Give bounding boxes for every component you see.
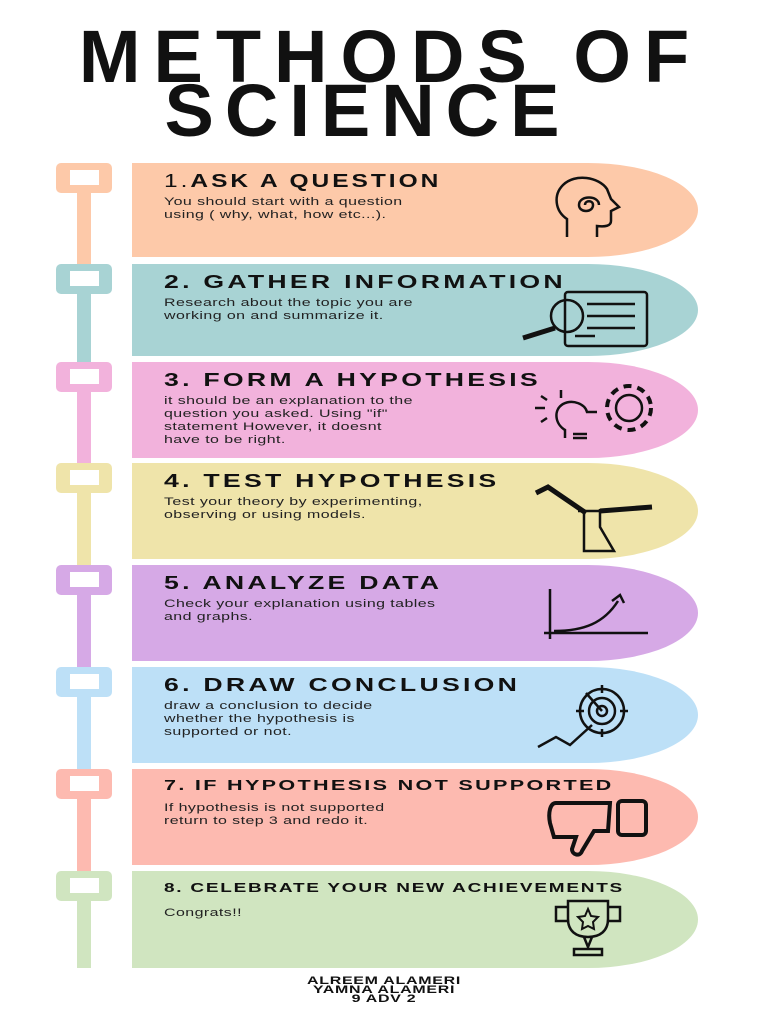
timeline bbox=[56, 163, 112, 968]
panel: draw conclusion: supported or not. bbox=[164, 726, 292, 738]
panel: ask a question: using ( why, what, how etc...). bbox=[164, 209, 386, 221]
panel: draw conclusion: draw a conclusion to decide bbox=[164, 700, 373, 712]
icon: graph bbox=[544, 589, 648, 639]
icon: trophy bbox=[554, 900, 622, 956]
panel: form a hypothesis: statement However, it doesnt bbox=[164, 421, 382, 433]
panel: gather information: working on and summarize it. bbox=[164, 310, 384, 322]
panel: test hypothesis: observing or using models. bbox=[164, 509, 366, 521]
icon: head bbox=[555, 176, 621, 237]
credits: YAMNA ALAMERI bbox=[313, 984, 455, 996]
icon: thumbs down bbox=[547, 799, 648, 857]
title: SCIENCE bbox=[165, 69, 570, 152]
icon: target bbox=[537, 685, 628, 748]
credits: 9 ADV 2 bbox=[352, 993, 416, 1005]
panel: draw conclusion bbox=[132, 667, 698, 763]
panel: if hypothesis not supported: If hypothesis is not supported bbox=[164, 802, 385, 814]
panel: ask a question: You should start with a question bbox=[164, 196, 403, 208]
icon: flask dropper bbox=[534, 484, 652, 552]
panel: ask a question: 1.ASK A QUESTION bbox=[164, 171, 441, 191]
panel: draw conclusion: 6. DRAW CONCLUSION bbox=[164, 675, 520, 695]
panel: if hypothesis not supported bbox=[132, 769, 698, 865]
panel: gather information: 2. GATHER INFORMATION bbox=[164, 272, 566, 292]
title: METHODS OF bbox=[79, 15, 702, 98]
panel: gather information: Research about the topic you are bbox=[164, 297, 413, 309]
panel: celebrate: Congrats!! bbox=[164, 907, 242, 919]
panel: celebrate: 8. CELEBRATE YOUR NEW ACHIEVEMENTS bbox=[164, 880, 624, 895]
panel: test hypothesis bbox=[132, 463, 698, 559]
panel: gather information bbox=[132, 264, 698, 356]
panel: if hypothesis not supported: 7. IF HYPOTHESIS NOT SUPPORTED bbox=[164, 777, 614, 794]
panel: analyze data bbox=[132, 565, 698, 661]
icon: magnifier document bbox=[522, 290, 648, 348]
panel: draw conclusion: whether the hypothesis is bbox=[164, 713, 355, 725]
title bbox=[79, 15, 702, 152]
panel: ask a question bbox=[132, 163, 698, 257]
panel: form a hypothesis: have to be right. bbox=[164, 434, 286, 446]
panel: analyze data: Check your explanation using tables bbox=[164, 598, 435, 610]
panel: analyze data: 5. ANALYZE DATA bbox=[164, 573, 442, 593]
icon: bulb and gear bbox=[535, 384, 653, 440]
panel: form a hypothesis: question you asked. Using "if" bbox=[164, 408, 388, 420]
panel: form a hypothesis bbox=[132, 362, 698, 458]
panel: if hypothesis not supported: return to step 3 and redo it. bbox=[164, 815, 368, 827]
credits bbox=[307, 975, 461, 1005]
panel: test hypothesis: Test your theory by experimenting, bbox=[164, 496, 423, 508]
panel: analyze data: and graphs. bbox=[164, 611, 253, 623]
panel: form a hypothesis: it should be an explanation to the bbox=[164, 395, 413, 407]
panel: celebrate bbox=[132, 871, 698, 968]
credits: ALREEM ALAMERI bbox=[307, 975, 461, 987]
panel: test hypothesis: 4. TEST HYPOTHESIS bbox=[164, 471, 499, 491]
panel: form a hypothesis: 3. FORM A HYPOTHESIS bbox=[164, 370, 541, 390]
